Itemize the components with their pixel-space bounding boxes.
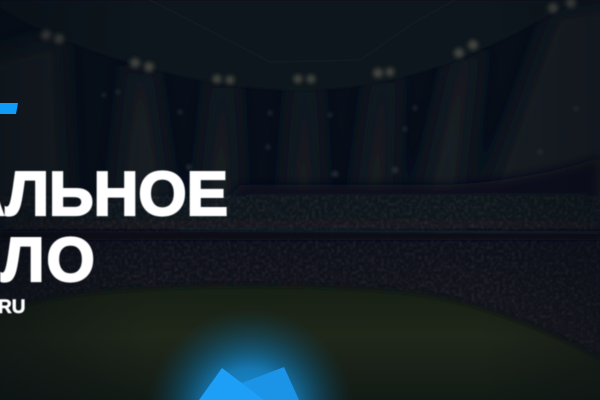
tier edge line (180, 229, 600, 233)
dark strip between tiers (0, 231, 600, 240)
floodlights (41, 0, 576, 84)
upper crowd band (0, 157, 600, 232)
roof panel detail (150, 0, 455, 62)
blue accent bar (0, 103, 18, 114)
pitch edge shadow (0, 285, 600, 358)
small sparkles (102, 90, 578, 177)
logo shape (199, 367, 299, 400)
lower crowd (0, 238, 600, 358)
blue glow (130, 300, 370, 400)
heading line 2: ЛО (1, 226, 97, 294)
pitch (0, 285, 600, 400)
crowd texture (0, 195, 600, 360)
stadium roof (0, 0, 575, 90)
light beams (0, 0, 600, 215)
